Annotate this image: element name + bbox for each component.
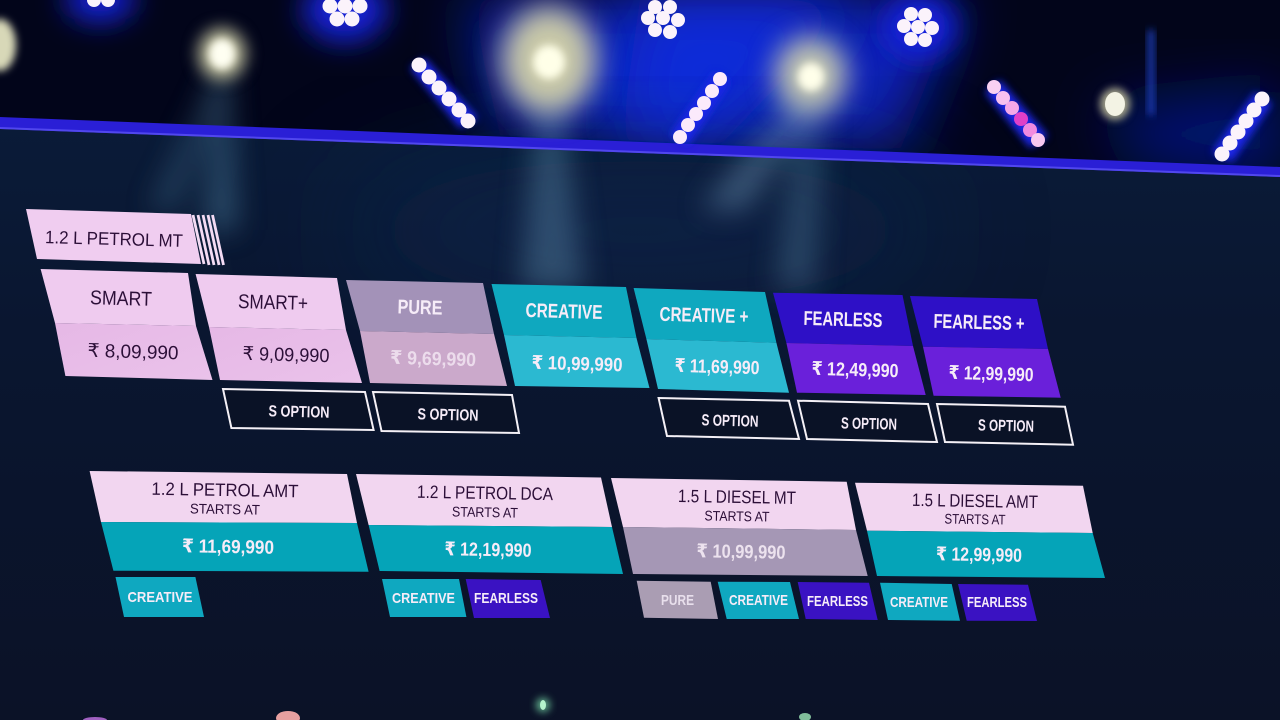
option: S OPTION under SMART+: S OPTION xyxy=(268,403,330,422)
spotlights xyxy=(0,6,1130,120)
heading text: 1.2 L PETROL MT xyxy=(45,227,183,251)
tag: CREATIVE under petrol AMT: CREATIVE xyxy=(128,589,192,606)
tag: CREATIVE under petrol AMT xyxy=(116,577,204,617)
panel: 1.2 L PETROL AMT: ₹ 11,69,990 xyxy=(182,536,274,559)
panel: FEARLESS: ₹ 12,49,990 xyxy=(811,359,899,382)
panel: CREATIVE xyxy=(492,284,650,388)
panel: CREATIVE: ₹ 10,99,990 xyxy=(531,353,623,376)
panel: 1.2 L PETROL DCA: 1.2 L PETROL DCA xyxy=(417,482,553,504)
cluster: centre xyxy=(641,0,685,39)
panel: FEARLESS + xyxy=(910,296,1061,398)
heading tag: 1.2 L PETROL MT xyxy=(26,209,224,265)
heading stripes xyxy=(193,215,224,265)
panel: PURE: PURE xyxy=(397,296,443,320)
panel: 1.5 L DIESEL AMT: 1.5 L DIESEL AMT xyxy=(912,490,1038,512)
tag: FEARLESS under diesel AMT: FEARLESS xyxy=(967,594,1027,611)
tag: FEARLESS under diesel AMT xyxy=(958,584,1037,621)
cluster: far left xyxy=(87,0,115,7)
tag: FEARLESS under petrol DCA: FEARLESS xyxy=(474,590,538,607)
panel: CREATIVE +: ₹ 11,69,990 xyxy=(674,356,760,379)
option: S OPTION under FEARLESS +: S OPTION xyxy=(978,417,1034,436)
panel: 1.5 L DIESEL MT: 1.5 L DIESEL MT xyxy=(678,486,796,508)
strip: descending left xyxy=(410,58,478,128)
option: S OPTION under FEARLESS: S OPTION xyxy=(841,415,897,434)
stage background with lights xyxy=(0,0,1280,180)
panel: 1.5 L DIESEL AMT xyxy=(855,483,1105,578)
panel: PURE xyxy=(346,280,507,386)
panel: 1.5 L DIESEL MT: STARTS AT xyxy=(704,507,770,525)
tag: CREATIVE under diesel AMT: CREATIVE xyxy=(890,594,948,611)
spotlight: large centre xyxy=(501,6,597,114)
tag: CREATIVE under diesel AMT xyxy=(880,583,960,621)
panel: SMART: ₹ 8,09,990 xyxy=(87,341,179,364)
spotlight: left edge xyxy=(0,19,16,71)
tag: FEARLESS under diesel MT xyxy=(798,582,878,620)
strip: pink descending xyxy=(985,80,1048,148)
panel: 1.5 L DIESEL MT: ₹ 10,99,990 xyxy=(696,541,786,564)
tag: CREATIVE under petrol DCA: CREATIVE xyxy=(392,590,455,607)
LED strips xyxy=(410,58,1272,162)
cluster: right xyxy=(897,7,939,47)
tag: PURE under diesel MT: PURE xyxy=(661,592,694,609)
panel: 1.2 L PETROL DCA xyxy=(356,474,623,574)
panel: 1.2 L PETROL AMT: 1.2 L PETROL AMT xyxy=(151,479,299,501)
panel: CREATIVE + xyxy=(634,288,789,393)
option: S OPTION under FEARLESS xyxy=(798,401,937,442)
panel: 1.5 L DIESEL MT xyxy=(611,478,868,576)
panel: FEARLESS +: ₹ 12,99,990 xyxy=(948,363,1034,386)
LED clusters xyxy=(87,0,939,47)
tag: CREATIVE under diesel MT: CREATIVE xyxy=(729,592,788,609)
panel: FEARLESS +: FEARLESS + xyxy=(933,311,1025,335)
option: S OPTION under SMART+ xyxy=(223,389,374,430)
strip: ascending centre xyxy=(670,72,730,145)
panel: 1.5 L DIESEL AMT: ₹ 12,99,990 xyxy=(936,544,1022,567)
panel: SMART: SMART xyxy=(90,287,152,311)
panel: FEARLESS xyxy=(773,293,926,395)
tag: CREATIVE under diesel MT xyxy=(718,582,799,619)
strip: ascending right xyxy=(1212,92,1272,162)
spotlight: right centre xyxy=(775,37,847,113)
panel: 1.2 L PETROL DCA: ₹ 12,19,990 xyxy=(444,539,532,562)
option: S OPTION under FEARLESS + xyxy=(937,404,1073,445)
tag: PURE under diesel MT xyxy=(637,581,718,619)
cluster: centre left xyxy=(322,0,368,26)
tag: FEARLESS under petrol DCA xyxy=(466,579,550,618)
option: S OPTION under PURE xyxy=(373,392,519,433)
panel: 1.2 L PETROL AMT: STARTS AT xyxy=(190,500,261,518)
option: S OPTION under CREATIVE +: S OPTION xyxy=(701,412,759,431)
panel: PURE: ₹ 9,69,990 xyxy=(390,348,476,371)
option: S OPTION under PURE: S OPTION xyxy=(417,406,479,425)
panel: CREATIVE: CREATIVE xyxy=(525,300,603,324)
option: S OPTION under CREATIVE + xyxy=(659,398,799,439)
spotlight: small left xyxy=(198,28,246,80)
panel: SMART+: ₹ 9,09,990 xyxy=(242,344,330,367)
panel: FEARLESS: FEARLESS xyxy=(803,308,883,332)
panel: CREATIVE +: CREATIVE + xyxy=(659,304,749,328)
light beams xyxy=(150,70,825,290)
panel: 1.5 L DIESEL AMT: STARTS AT xyxy=(944,510,1006,528)
panel: 1.2 L PETROL DCA: STARTS AT xyxy=(452,503,519,521)
audience light specks xyxy=(83,698,811,720)
panel: SMART+ xyxy=(196,274,362,383)
tag: CREATIVE under petrol DCA xyxy=(382,579,466,617)
spotlight: small right xyxy=(1100,88,1130,120)
panel: SMART xyxy=(41,269,212,380)
tag: FEARLESS under diesel MT: FEARLESS xyxy=(807,593,868,610)
panel: SMART+: SMART+ xyxy=(238,291,308,315)
blue stage line xyxy=(0,117,1280,177)
panel: 1.2 L PETROL AMT xyxy=(90,471,369,572)
